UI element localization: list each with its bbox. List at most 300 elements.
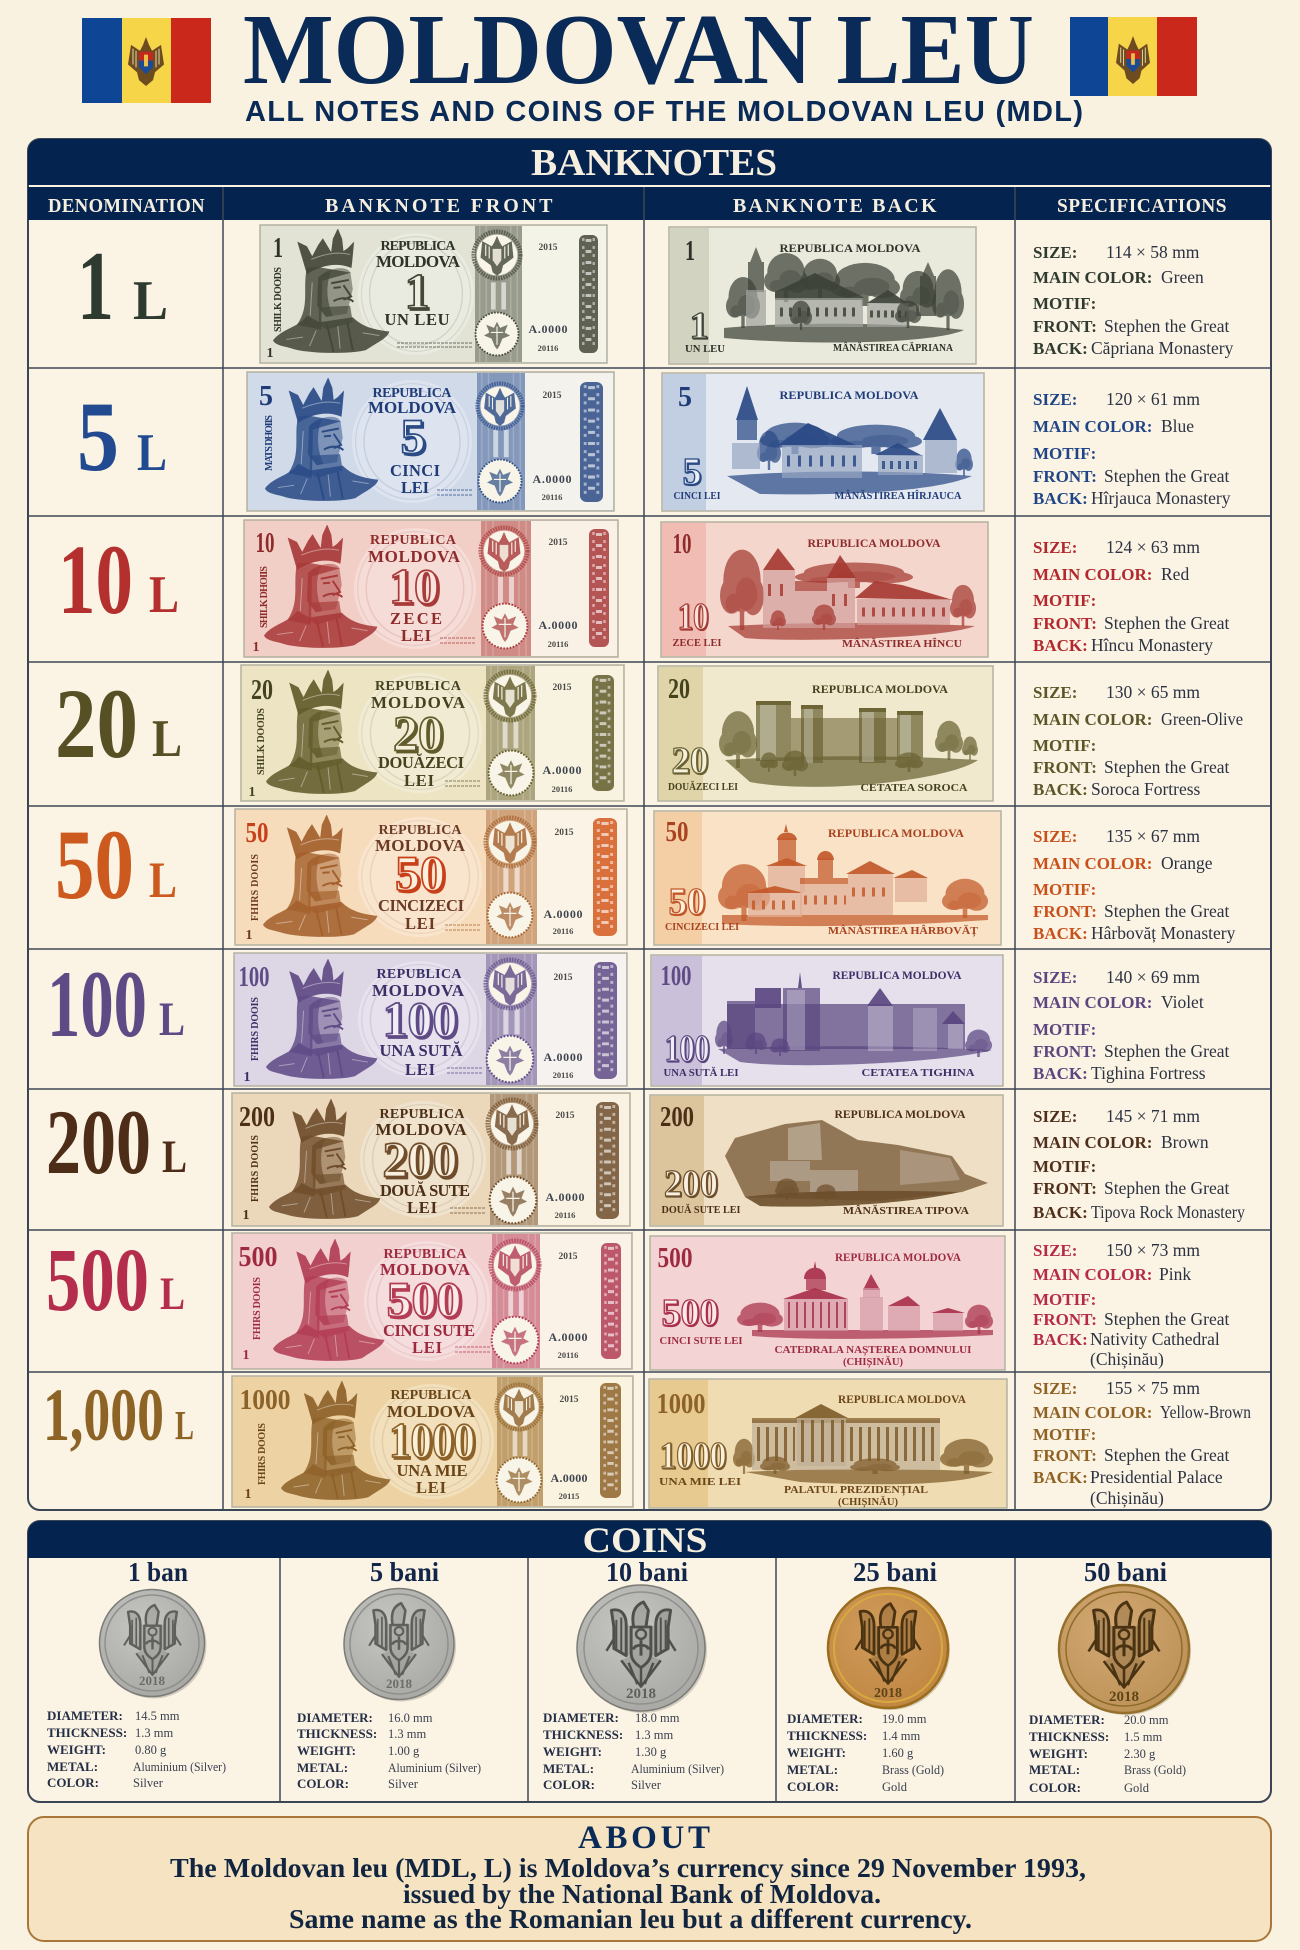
denomination 10 L: L <box>149 566 179 624</box>
banknote front: 5 lei: MOLDOVA <box>368 398 457 417</box>
banknote back: 500 lei <box>650 1236 1005 1370</box>
specifications: 100 lei: FRONT: <box>1033 1042 1097 1061</box>
portrait <box>264 524 377 648</box>
specifications: 10 lei: Hîncu Monastery <box>1091 635 1213 655</box>
specifications: 200 lei: 145 × 71 mm <box>1106 1106 1200 1126</box>
specifications: 5 lei: Blue <box>1161 416 1194 436</box>
specifications: 5 lei: Stephen the Great <box>1104 466 1230 486</box>
specifications: 1000 lei: FRONT: <box>1033 1446 1097 1465</box>
specifications: 10 lei: MOTIF: <box>1033 591 1096 610</box>
specifications: 200 lei: Brown <box>1161 1132 1209 1152</box>
coin: 50 bani: 2.30 g <box>1124 1747 1156 1761</box>
denomination 50 L: L <box>149 853 177 909</box>
specifications: 50 lei <box>1033 826 1236 943</box>
specifications: 1 leu: MAIN COLOR: <box>1033 268 1152 287</box>
specifications: 200 lei: Stephen the Great <box>1104 1178 1230 1198</box>
banknote back: 100 lei: CETATEA TIGHINA <box>862 1067 975 1079</box>
coin: 25 bani: 1.4 mm <box>882 1729 920 1743</box>
banknote front: 50 lei: REPUBLICA <box>378 823 462 838</box>
specifications: 20 lei <box>1033 682 1243 799</box>
denomination 100 L: 100 <box>47 951 147 1057</box>
coin: 1 ban: 1 ban <box>128 1557 188 1587</box>
banknote back: 1 leu: REPUBLICA MOLDOVA <box>780 243 921 255</box>
coin: 50 bani: COLOR: <box>1029 1780 1081 1795</box>
specifications: 10 lei: MAIN COLOR: <box>1033 565 1152 584</box>
specifications: 50 lei: SIZE: <box>1033 827 1077 846</box>
coin: 5 bani: 1.3 mm <box>388 1727 426 1741</box>
specifications: 1000 lei <box>1033 1378 1251 1508</box>
banknote front: 100 lei: 100 <box>382 991 458 1047</box>
specifications: 10 lei: Stephen the Great <box>1104 613 1230 633</box>
flag: right <box>1070 17 1197 96</box>
banknote front: 10 lei: 20116 <box>548 639 568 649</box>
portrait <box>281 1380 390 1500</box>
portrait <box>273 228 389 353</box>
portrait <box>266 958 377 1079</box>
coin: 50 bani: WEIGHT: <box>1029 1746 1088 1761</box>
banknote back: 20 lei: CETATEA SOROCA <box>860 782 968 794</box>
banknote front: 1 leu: MOLDOVA <box>376 252 461 271</box>
banknote front: 100 lei: A.0000 <box>544 1050 582 1064</box>
banknote front: 1 leu: A.0000 <box>528 322 568 336</box>
banknote front: 10 lei: REPUBLICA <box>370 533 457 548</box>
coin: 1 ban: Aluminium (Silver) <box>133 1760 226 1774</box>
denomination 1,000 L: 1,000 <box>43 1374 164 1457</box>
specifications: 20 lei: Stephen the Great <box>1104 757 1230 777</box>
banknote back: 500 lei: CATEDRALA NAȘTEREA DOMNULUI <box>774 1344 972 1356</box>
specifications: 5 lei: MAIN COLOR: <box>1033 417 1152 436</box>
specifications: 100 lei: Violet <box>1161 992 1204 1012</box>
denomination 500 L: L <box>160 1268 185 1320</box>
banknote back: 200 lei: MÂNĂSTIREA TIPOVA <box>843 1205 969 1217</box>
panel: banknotes <box>28 139 1271 1510</box>
banknote front: 100 lei: REPUBLICA <box>376 967 462 982</box>
specifications: 20 lei: FRONT: <box>1033 758 1097 777</box>
banknote front: 1000 lei: FHIRS DOOIS <box>257 1423 268 1485</box>
banknote front: 20 lei: 20 <box>393 705 443 761</box>
banknote back: 500 lei: (CHIȘINĂU) <box>843 1356 903 1368</box>
banknote back: 20 lei: 20 <box>668 674 690 705</box>
specifications: 500 lei: Nativity Cathedral <box>1090 1329 1220 1349</box>
banknote front: 200 lei: 2015 <box>556 1111 575 1121</box>
banknote back: 1 leu: MÂNĂSTIREA CĂPRIANA <box>833 342 953 354</box>
banknote front: 20 lei: 20116 <box>552 784 572 794</box>
coin image <box>344 1588 456 1702</box>
coin: 5 bani: DIAMETER: <box>297 1710 373 1725</box>
specifications: 100 lei: Stephen the Great <box>1104 1041 1230 1061</box>
specifications: 1 leu: Stephen the Great <box>1104 316 1230 336</box>
specifications: 100 lei <box>1033 967 1230 1083</box>
banknote back: 50 lei: REPUBLICA MOLDOVA <box>828 828 965 840</box>
coin: 10 bani: 10 bani <box>606 1557 688 1587</box>
banknotes heading bar <box>28 139 1271 185</box>
coin: 1 ban: COLOR: <box>47 1775 99 1790</box>
banknote back: 500 lei: 500 <box>658 1243 692 1274</box>
banknote front: 100 lei: MOLDOVA <box>372 981 465 1000</box>
specifications: 500 lei: Stephen the Great <box>1104 1309 1230 1329</box>
specifications: 10 lei: FRONT: <box>1033 614 1097 633</box>
coin: 50 bani: THICKNESS: <box>1029 1729 1109 1744</box>
specifications: 10 lei: BACK: <box>1033 636 1088 655</box>
specifications: 1 leu: Green <box>1161 267 1204 287</box>
coin: 25 bani: THICKNESS: <box>787 1728 867 1743</box>
denomination 5 L: 5 <box>77 381 119 492</box>
banknote back: 200 lei: DOUĂ SUTE LEI <box>662 1204 740 1216</box>
banknote front: 50 lei: 50 <box>395 845 445 901</box>
banknote front: 10 lei: 10 <box>389 558 439 614</box>
coin image: 2018 <box>1109 1689 1139 1705</box>
specifications: 10 lei: Red <box>1161 564 1189 584</box>
specifications: 1 leu: SIZE: <box>1033 243 1077 262</box>
specifications: 1 leu: MOTIF: <box>1033 294 1096 313</box>
banknote front: 50 lei: CINCIZECI <box>378 896 464 915</box>
specifications: 5 lei: FRONT: <box>1033 467 1097 486</box>
coin: 1 ban: METAL: <box>47 1759 98 1774</box>
banknote back: 100 lei: 100 <box>660 961 692 992</box>
specifications: 10 lei: SIZE: <box>1033 538 1077 557</box>
banknote back: 20 lei <box>658 666 993 801</box>
banknote back: 200 lei <box>650 1095 1003 1226</box>
banknote front: 1000 lei <box>232 1376 633 1507</box>
specifications: 500 lei <box>1033 1240 1230 1369</box>
coin: 50 bani: Gold <box>1124 1781 1150 1795</box>
column headers <box>28 187 1271 220</box>
about text <box>170 1853 1086 1934</box>
denomination numerals <box>43 232 194 1457</box>
banknote back: 5 lei: CINCI LEI <box>674 490 720 502</box>
coin: 50 bani: 50 bani <box>1084 1557 1167 1587</box>
specifications: 200 lei: BACK: <box>1033 1203 1088 1222</box>
specifications: 50 lei: Orange <box>1161 853 1213 873</box>
banknote front: 20 lei: DOUĂZECI <box>378 753 464 772</box>
banknote front: 1 leu: SHILK DOODS <box>273 267 284 332</box>
banknote front: 500 lei: 500 <box>238 1242 278 1273</box>
coin: 25 bani: DIAMETER: <box>787 1711 863 1726</box>
denomination 200 L: 200 <box>46 1091 151 1193</box>
specifications: 200 lei: MAIN COLOR: <box>1033 1133 1152 1152</box>
denomination 10 L: 10 <box>58 524 133 635</box>
banknote front: 200 lei: 20116 <box>555 1210 575 1220</box>
banknote front: 50 lei: 2015 <box>554 828 574 838</box>
banknote front: 5 lei: LEI <box>401 478 429 497</box>
specifications: 10 lei <box>1033 537 1230 655</box>
banknote front: 5 lei: CINCI <box>390 461 440 480</box>
specifications: 1000 lei: 155 × 75 mm <box>1106 1378 1200 1398</box>
specifications: 500 lei: 150 × 73 mm <box>1106 1240 1200 1260</box>
specifications: 500 lei: MOTIF: <box>1033 1290 1096 1309</box>
banknote front: 1000 lei: 2015 <box>560 1395 579 1405</box>
denomination 200 L: L <box>162 1131 187 1183</box>
coin: 10 bani <box>543 1557 724 1792</box>
banknote front: 50 lei: 20116 <box>553 926 573 936</box>
coin: 5 bani: 5 bani <box>370 1557 439 1587</box>
banknote back: 5 lei: 5 <box>682 451 702 493</box>
coin image <box>1059 1585 1191 1715</box>
banknote back: 5 lei: MÂNĂSTIREA HÎRJAUCA <box>834 490 962 502</box>
coin: 10 bani: COLOR: <box>543 1777 595 1792</box>
banknote back: 1 leu: UN LEU <box>685 343 725 355</box>
specifications: 500 lei: FRONT: <box>1033 1310 1097 1329</box>
coin: 5 bani: THICKNESS: <box>297 1726 377 1741</box>
specifications: 200 lei: FRONT: <box>1033 1179 1097 1198</box>
banknote back: 1 leu <box>669 227 976 364</box>
banknote front: 10 lei: 2015 <box>548 538 568 548</box>
specifications: 100 lei: Tighina Fortress <box>1091 1063 1206 1083</box>
denomination 50 L: 50 <box>55 809 134 920</box>
banknote front: 100 lei: FHIRS DOOIS <box>250 997 261 1061</box>
banknote back: 1 leu: 1 <box>685 236 695 267</box>
denomination 5 L: L <box>137 424 167 482</box>
coin: 5 bani <box>297 1557 481 1791</box>
banknote front: 5 lei: MATS DHOIIS <box>264 415 275 471</box>
coin: 25 bani: 25 bani <box>853 1557 937 1587</box>
coin: 25 bani <box>787 1557 950 1794</box>
specifications: 500 lei: BACK: <box>1033 1330 1088 1349</box>
specifications: 5 lei: MOTIF: <box>1033 444 1096 463</box>
specifications: 5 lei <box>1033 389 1231 508</box>
specifications: 200 lei: MOTIF: <box>1033 1157 1096 1176</box>
coin: 5 bani: WEIGHT: <box>297 1743 356 1758</box>
banknote front: 500 lei: REPUBLICA <box>384 1247 467 1262</box>
coin: 50 bani: DIAMETER: <box>1029 1712 1105 1727</box>
banknote front: 1 leu: 1 <box>273 233 283 264</box>
banknote front: 10 lei: 1 <box>252 640 260 655</box>
about heading: ABOUT <box>578 1820 710 1856</box>
specifications: 1000 lei: MOTIF: <box>1033 1425 1096 1444</box>
coin: 5 bani: Aluminium (Silver) <box>388 1761 481 1775</box>
banknote front: 1000 lei: A.0000 <box>550 1471 588 1485</box>
coin: 25 bani: Brass (Gold) <box>882 1763 944 1777</box>
specifications: 50 lei: FRONT: <box>1033 902 1097 921</box>
banknote back: 50 lei <box>654 811 1001 945</box>
banknote back: 50 lei: CINCIZECI LEI <box>665 921 739 933</box>
coin: 1 ban: 0.80 g <box>135 1743 167 1757</box>
banknote front: 1000 lei: LEI <box>416 1478 446 1497</box>
specifications: 5 lei: BACK: <box>1033 489 1088 508</box>
coin: 50 bani: METAL: <box>1029 1762 1080 1777</box>
banknote back: 10 lei: ZECE LEI <box>672 637 722 649</box>
coin: 10 bani: Aluminium (Silver) <box>631 1762 724 1776</box>
banknote front: 20 lei: 20 <box>251 675 273 706</box>
banknote back: 100 lei <box>651 955 1003 1086</box>
banknote back: 10 lei: REPUBLICA MOLDOVA <box>808 538 941 550</box>
banknote front: 1 leu: 1 <box>404 263 430 319</box>
banknote front: 1000 lei: 20115 <box>559 1491 579 1501</box>
specifications: 1000 lei: SIZE: <box>1033 1379 1077 1398</box>
coin: 10 bani: 1.3 mm <box>635 1728 673 1742</box>
specifications: 50 lei: Stephen the Great <box>1104 901 1230 921</box>
banknote front: 5 lei: 20116 <box>542 492 562 502</box>
specifications: 1000 lei: MAIN COLOR: <box>1033 1403 1152 1422</box>
banknote back: 1000 lei: UNA MIE LEI <box>659 1476 741 1488</box>
banknote front: 100 lei: 100 <box>238 962 270 993</box>
banknote front: 50 lei: MOLDOVA <box>375 836 466 855</box>
banknote front: 50 lei: LEI <box>405 914 435 933</box>
about text: issued by the National Bank of Moldova. <box>403 1879 881 1909</box>
specifications: 50 lei: BACK: <box>1033 924 1088 943</box>
banknote back: 50 lei: 50 <box>666 817 688 848</box>
banknote front: 5 lei: REPUBLICA <box>372 386 452 401</box>
banknote front: 1000 lei: MOLDOVA <box>387 1402 476 1421</box>
banknote front: 500 lei: 2015 <box>558 1252 578 1262</box>
coin: 5 bani: 16.0 mm <box>388 1711 433 1725</box>
banknote back: 1000 lei: 1000 <box>656 1389 706 1420</box>
specifications: 1 leu: 114 × 58 mm <box>1106 242 1200 262</box>
banknote front: 200 lei: 1 <box>242 1208 250 1223</box>
portrait <box>263 814 377 937</box>
banknote front: 20 lei: 2015 <box>552 683 572 693</box>
coin: 1 ban: WEIGHT: <box>47 1742 106 1757</box>
subtitle: ALL NOTES AND COINS OF THE MOLDOVAN LEU (MDL) <box>245 96 1083 128</box>
banknote front: 200 lei: 200 <box>239 1102 275 1133</box>
coin: 25 bani: 1.60 g <box>882 1746 914 1760</box>
specifications: 5 lei: SIZE: <box>1033 390 1077 409</box>
column headers: DENOMINATION <box>48 195 205 217</box>
coin: 25 bani: WEIGHT: <box>787 1745 846 1760</box>
banknote front: 200 lei: MOLDOVA <box>376 1120 467 1139</box>
specifications: 1000 lei: Presidential Palace <box>1090 1467 1223 1487</box>
portrait <box>269 1098 380 1219</box>
banknote front: 1000 lei: 1000 <box>389 1412 475 1468</box>
specifications: 500 lei: MAIN COLOR: <box>1033 1265 1152 1284</box>
banknote front: 10 lei: LEI <box>401 626 431 645</box>
banknote front: 200 lei: LEI <box>407 1198 437 1217</box>
specifications: 50 lei: MAIN COLOR: <box>1033 854 1152 873</box>
banknote back: 50 lei: 50 <box>668 881 706 923</box>
panel: coins <box>28 1520 1271 1802</box>
banknote back: 1000 lei <box>649 1379 1007 1508</box>
about text: The Moldovan leu (MDL, L) is Moldova’s currency since 29 November 1993, <box>170 1853 1086 1883</box>
banknote front: 5 lei: 5 <box>259 381 273 412</box>
panel: about <box>28 1817 1271 1941</box>
banknote back: 1000 lei: REPUBLICA MOLDOVA <box>838 1394 967 1406</box>
banknote front: 1 leu: 20116 <box>538 343 558 353</box>
coin: 5 bani: COLOR: <box>297 1776 349 1791</box>
specifications: 20 lei: MAIN COLOR: <box>1033 710 1152 729</box>
coin: 1 ban <box>47 1557 226 1790</box>
banknote front: 50 lei: A.0000 <box>544 907 582 921</box>
coins heading bar: COINS <box>582 1520 708 1560</box>
banknote front: 500 lei: 500 <box>386 1271 462 1327</box>
banknote front: 1 leu: 1 <box>266 346 274 361</box>
denomination 1,000 L: L <box>175 1402 194 1448</box>
coin: 5 bani: Silver <box>388 1777 419 1791</box>
coin image <box>100 1590 206 1698</box>
denomination 1 L: 1 <box>77 232 114 341</box>
denomination 1 L <box>77 232 168 341</box>
banknote front: 20 lei: REPUBLICA <box>375 679 462 694</box>
banknote front: 500 lei: A.0000 <box>548 1330 588 1344</box>
banknote front: 1000 lei: 1 <box>244 1487 252 1502</box>
banknote back: 500 lei: 500 <box>662 1292 718 1334</box>
banknote front: 20 lei: A.0000 <box>542 763 582 777</box>
banknote front: 50 lei <box>235 809 627 945</box>
banknote back: 200 lei: 200 <box>660 1102 694 1133</box>
banknote front: 200 lei: DOUĂ SUTE <box>380 1181 470 1200</box>
coin image: 2018 <box>386 1676 412 1691</box>
banknote front: 1 leu: REPUBLICA <box>380 239 456 254</box>
banknote front: 500 lei: CINCI SUTE <box>383 1321 475 1340</box>
specifications: 1000 lei: (Chișinău) <box>1090 1488 1164 1508</box>
banknote front: 10 lei: 10 <box>256 528 274 559</box>
banknote front: 200 lei: A.0000 <box>546 1190 584 1204</box>
portrait <box>273 1238 384 1361</box>
banknote back: 200 lei: 200 <box>664 1163 718 1205</box>
banknote back: 500 lei: CINCI SUTE LEI <box>660 1335 742 1347</box>
banknote front: 10 lei: A.0000 <box>538 618 578 632</box>
coin: 1 ban: Silver <box>133 1776 164 1790</box>
banknote back: 1000 lei: PALATUL PREZIDENȚIAL <box>784 1484 928 1496</box>
specifications: 50 lei: Hârbovăț Monastery <box>1091 923 1236 943</box>
banknote front: 1 leu <box>260 225 607 363</box>
banknote front: 10 lei: SHILK DHOIIS <box>259 566 270 628</box>
coin: 50 bani: Brass (Gold) <box>1124 1763 1186 1777</box>
banknote front: 1000 lei: 1000 <box>240 1385 290 1416</box>
banknote back: 10 lei <box>661 522 988 657</box>
banknote front: 100 lei: UNA SUTĂ <box>380 1041 463 1060</box>
banknote front: 1000 lei: REPUBLICA <box>390 1388 472 1403</box>
coin: 10 bani: DIAMETER: <box>543 1710 619 1725</box>
banknote back: 10 lei: 10 <box>678 596 708 638</box>
banknote front: 500 lei <box>232 1233 632 1369</box>
coin: 10 bani: METAL: <box>543 1761 594 1776</box>
coin image: 2018 <box>139 1673 166 1688</box>
banknote front: 100 lei: 20116 <box>553 1070 573 1080</box>
specifications: 20 lei: MOTIF: <box>1033 736 1096 755</box>
specifications: 20 lei: 130 × 65 mm <box>1106 682 1200 702</box>
banknote front: 1 leu: 2015 <box>538 243 558 253</box>
specifications: 50 lei: MOTIF: <box>1033 880 1096 899</box>
specifications: 20 lei: SIZE: <box>1033 683 1077 702</box>
banknote back: 10 lei: 10 <box>672 529 692 560</box>
coin: 5 bani: METAL: <box>297 1760 348 1775</box>
banknote front: 5 lei: A.0000 <box>532 472 572 486</box>
banknote front: 500 lei: FHIRS DOOIS <box>252 1277 263 1340</box>
banknote back: 5 lei <box>662 373 984 511</box>
banknote front: 200 lei <box>232 1093 630 1226</box>
portrait <box>266 669 377 794</box>
coin: 25 bani: Gold <box>882 1780 908 1794</box>
specifications: 20 lei: BACK: <box>1033 780 1088 799</box>
banknote back: 100 lei: 100 <box>664 1028 710 1070</box>
column headers: BANKNOTE BACK <box>733 195 937 217</box>
banknote back: 20 lei: DOUĂZECI LEI <box>668 781 738 793</box>
banknote front: 500 lei: MOLDOVA <box>380 1260 471 1279</box>
banknote front: 100 lei: LEI <box>405 1060 435 1079</box>
banknote back: 200 lei: REPUBLICA MOLDOVA <box>834 1109 966 1121</box>
specifications: 200 lei: SIZE: <box>1033 1107 1077 1126</box>
banknote back: 20 lei: REPUBLICA MOLDOVA <box>812 684 949 696</box>
banknote front: 10 lei: ZECE <box>390 609 442 628</box>
coin: 25 bani: METAL: <box>787 1762 838 1777</box>
banknote front: 100 lei: 1 <box>244 1070 250 1085</box>
specifications: 20 lei: Soroca Fortress <box>1091 779 1201 799</box>
specifications: 1000 lei: BACK: <box>1033 1468 1088 1487</box>
banknote back: 100 lei: UNA SUTĂ LEI <box>664 1067 738 1079</box>
banknote front: 500 lei: 20116 <box>558 1350 578 1360</box>
banknote front: 500 lei: LEI <box>412 1338 442 1357</box>
banknote front: 5 lei: 5 <box>400 408 426 464</box>
banknote front: 1000 lei: UNA MIE <box>396 1461 468 1480</box>
column headers: SPECIFICATIONS <box>1057 195 1227 217</box>
coin: 10 bani: 18.0 mm <box>635 1711 680 1725</box>
banknote front: 100 lei: 2015 <box>554 973 573 983</box>
banknote back: 5 lei: REPUBLICA MOLDOVA <box>780 390 919 402</box>
specifications: 1 leu: FRONT: <box>1033 317 1097 336</box>
banknote front: 100 lei <box>234 953 627 1086</box>
coin: 25 bani: COLOR: <box>787 1779 839 1794</box>
coin: 50 bani: 1.5 mm <box>1124 1730 1162 1744</box>
